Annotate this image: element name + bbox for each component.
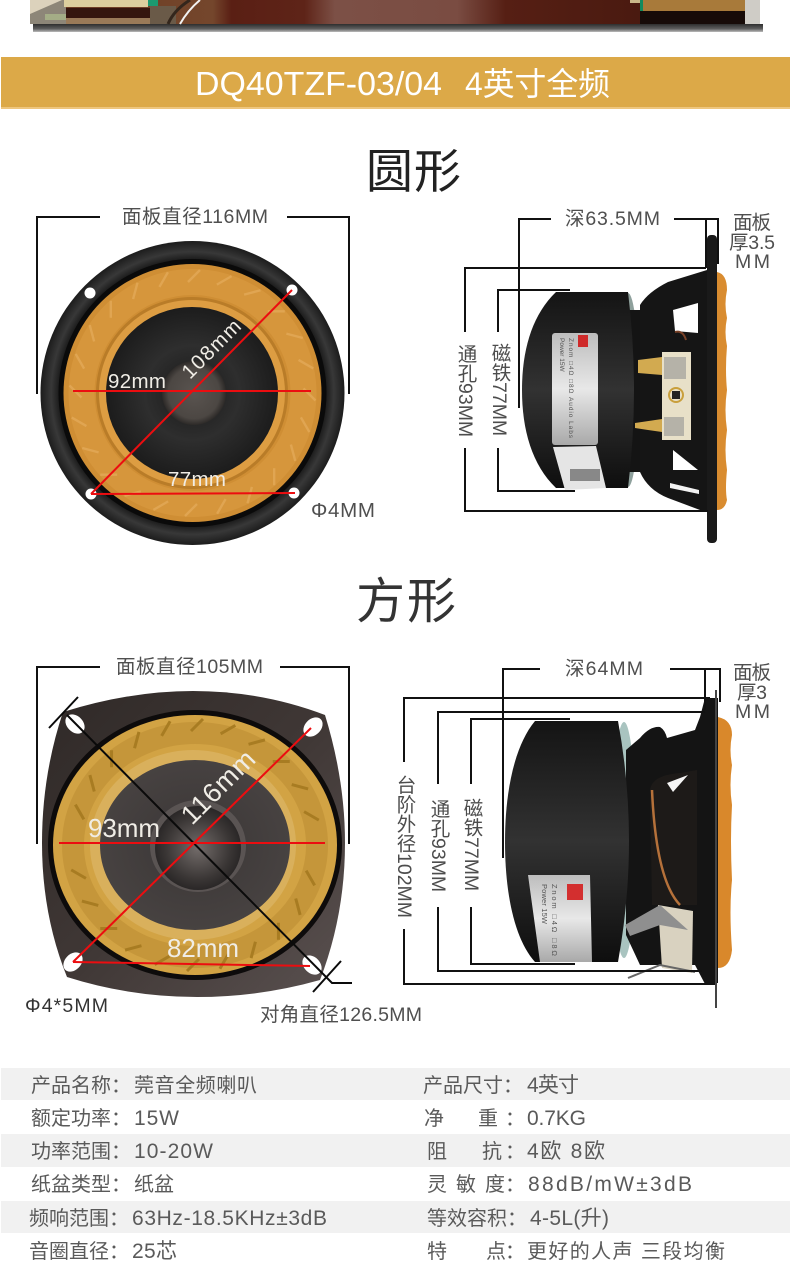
row: power range and impedance: 抗 [482,1140,502,1163]
banner: model title: DQ40TZF-03/04 [195,65,442,102]
row: voice coil and feature [29,1240,725,1263]
panel thickness label: 面板 [733,212,771,234]
vertical label: magnet 77 round: 磁铁77MM [488,343,510,436]
dimension bracket: panel diameter 105 [37,656,349,844]
vertical label: vent 93 square: 通孔93MM [427,799,449,892]
row: power and weight: 0.7KG [527,1107,586,1130]
row: name and size: 莞音全频喇叭 [134,1074,257,1097]
panel thickness label: 面板 [733,662,771,684]
row: frequency and volume: 频响范围： [29,1207,129,1230]
measurement labels: 77mm [168,468,226,491]
row: cone type and sensitivity: 灵 [427,1174,447,1196]
row: frequency and volume: 63Hz-18.5KHz±3dB [132,1207,327,1230]
dimension bracket: depth 64: 深64MM [565,658,643,680]
hole size label: Φ4*5MM [25,995,108,1017]
panel thickness label: 厚3.5 [729,232,775,254]
vertical label: step 102 square: 台阶外径102MM [393,775,415,918]
row: power range and impedance [31,1140,605,1163]
dimension bracket: magnet 77 [471,719,575,964]
dimension bracket: depth 63.5: 深63.5MM [565,208,660,230]
row: cone type and sensitivity: 纸盆类型： [31,1173,131,1196]
measurement labels: 108mm [177,315,246,384]
row: cone type and sensitivity: ： [505,1174,525,1196]
row: cone type and sensitivity: 纸盆 [134,1173,174,1196]
panel: round speaker front [37,206,375,545]
speaker: square side view [505,690,732,1008]
diagonal dimension: black [49,697,352,992]
row: name and size [31,1074,579,1097]
panel thickness label [729,212,775,273]
spec table [1,1068,790,1263]
row: power range and impedance: 功率范围： [31,1140,131,1163]
row: power and weight [31,1107,586,1130]
vertical label: vent 93 round: 通孔93MM [454,344,476,437]
measurement labels: 92mm [108,370,166,393]
row: name and size: 产品尺寸： [423,1074,523,1097]
speaker: square side view: Znom □4Ω □8Ω [550,884,559,956]
row: power range and impedance: 4欧 8欧 [527,1140,605,1163]
panel: square speaker front [25,656,422,1026]
row: power and weight: 额定功率： [31,1107,131,1130]
row: voice coil and feature: 25芯 [132,1240,177,1263]
measurement labels [88,744,261,963]
speaker: round side view [522,235,727,543]
heading: round: 圆形 [366,145,461,198]
panel: round speaker side [465,208,775,543]
dimension bracket: vent 93 [438,712,705,971]
row: voice coil and feature: 音圈直径： [29,1240,129,1263]
row: power range and impedance: ： [505,1141,525,1163]
row: power range and impedance: 10-20W [134,1140,213,1163]
dimension bracket: panel diameter 116 [37,206,349,394]
row: name and size: 产品名称： [31,1074,131,1097]
speaker: square side view: Power 15W [540,884,549,925]
row: voice coil and feature: 特 [427,1240,447,1263]
panel thickness label: 厚3 [737,682,767,704]
dimension bracket: vent 93 [465,268,708,511]
measurement labels: 116mm [175,744,261,830]
dimension lines: red measurements [59,728,325,966]
dimension lines: red measurements [73,290,311,494]
row: cone type and sensitivity: 88dB/mW±3dB [528,1173,692,1196]
panel thickness label: MM [735,701,770,723]
panel: square speaker side [404,658,771,1008]
hole size label: Φ4MM [311,499,375,522]
panel thickness label [733,662,771,723]
row: frequency and volume: 4-5L(升) [530,1207,609,1230]
row: frequency and volume [29,1207,609,1230]
dimension bracket: depth 63.5 [519,208,718,408]
heading: square: 方形 [356,575,456,629]
speaker: square front view [42,691,345,997]
speaker: round front view [40,241,344,545]
panel thickness label: MM [735,251,770,273]
diagonal diameter label: 对角直径126.5MM [260,1004,422,1026]
row: name and size: 4英寸 [527,1074,579,1097]
measurement labels [108,315,246,491]
dimension bracket: panel diameter 105: 面板直径105MM [116,656,263,678]
row: power and weight: 重 [478,1107,498,1130]
row: voice coil and feature: 更好的人声 三段均衡 [527,1240,725,1263]
row: frequency and volume: 等效容积： [427,1207,527,1230]
dimension bracket: step 102 [404,698,715,984]
row: cone type and sensitivity: 度 [485,1173,505,1196]
banner: model title: 4英寸全频 [465,66,610,102]
speaker: round side view: Znom □4Ω □8Ω Audio Labs [567,338,574,439]
banner: model title [1,57,790,109]
dimension bracket: panel diameter 116: 面板直径116MM [122,206,268,228]
dimension bracket: depth 64 [503,658,720,858]
row: power and weight: ： [505,1108,525,1130]
row: cone type and sensitivity: 敏 [456,1173,476,1196]
row: power and weight: 净 [424,1107,444,1130]
speaker: round side view: Power 15W [558,338,565,372]
measurement labels: 82mm [167,933,239,963]
row: voice coil and feature: 点 [486,1240,506,1263]
row: voice coil and feature: ： [505,1241,525,1263]
dimension bracket: magnet 77 [498,290,575,491]
row: power range and impedance: 阻 [427,1140,447,1163]
top photo strip [30,0,763,32]
measurement labels: 93mm [88,813,160,843]
vertical label: magnet 77 square: 磁铁77MM [460,798,482,891]
row: cone type and sensitivity [31,1173,692,1196]
row: power and weight: 15W [134,1107,179,1130]
